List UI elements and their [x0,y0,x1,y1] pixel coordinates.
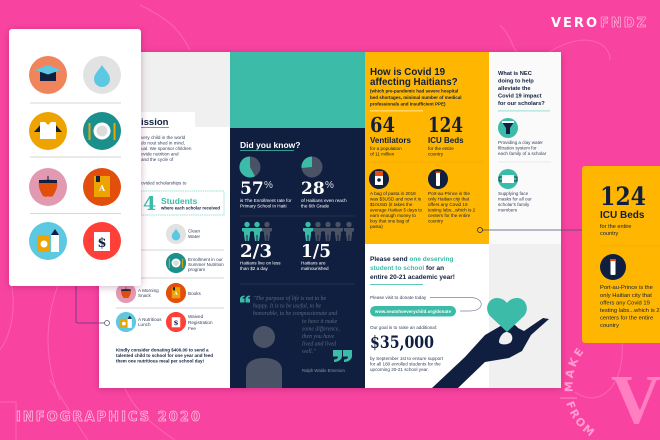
panel: donation [365,244,561,388]
benefit: clean water: Clean [188,228,200,234]
goal text: Our goal is to raise an additional: [370,325,437,330]
face mask text: scholar's family [498,202,530,207]
subheading: (which pre-pandemic had severe hospital [370,88,458,94]
benefit: summer nutrition: Enrollment in our [188,257,223,262]
stat icu beds: ICU Beds [428,136,464,145]
heading: one deserving [409,256,453,263]
stat 1 of 5 [301,241,331,271]
benefit: lunch: Lunch [138,322,151,327]
stat icu beds [428,113,464,156]
stat 2 of 3 [240,241,281,271]
face mask text: members [498,208,518,212]
donation link pill [370,306,456,316]
benefit: morning snack: Snack [138,293,151,298]
students box: 4 [143,193,156,215]
stat 57: % [264,180,273,191]
heading: doing to help [498,78,534,84]
icon: lunch [29,222,67,260]
panel: did you know [230,52,365,388]
callout: ICU beds: for the entire [600,224,631,230]
icon: plate [83,112,121,150]
pasta text: earn enough money to [370,213,416,218]
donate prompt: Please visit to donate today [370,295,427,300]
stat 57: is The Enrollment rate for [240,198,292,203]
water filter text: Providing a clay water [498,140,543,145]
quote author: Ralph Waldo Emerson [302,368,345,373]
footer title: INFOGRAPHICS 2020 [16,410,200,425]
pasta text: was $3USD and now it is [370,196,422,202]
benefit: lunch: A Nutritious [138,317,162,322]
students box: Students [161,196,198,206]
mission paragraph: ovide nutrition and [141,152,179,156]
mission paragraph: and the cycle of [141,157,174,162]
stat 2 of 3: than $2 a day [240,266,269,271]
panel: what is NEC doing [489,52,561,244]
stat ventilators: for a population [370,146,402,151]
goal details: by September 1st to ensure support [370,356,444,361]
stat 28: the 6th Grade [301,204,330,208]
testing text: Port-au-Prince is the [428,191,470,196]
callout: ICU beds: centers for the entire [600,316,653,322]
quote text: then you have [302,334,335,340]
heading: What is NEC [498,71,532,77]
stat 28 [301,179,347,208]
quote text: lived and lived [302,342,336,348]
brand logo: VERO [551,16,597,31]
benefit: lunch [116,312,162,332]
heading: Please send [370,256,409,263]
callout: ICU beds: 124 [600,182,646,211]
stat icu beds: country [428,152,444,156]
connector: card to lunch item [76,286,110,326]
brand logo: FNDZ [600,16,646,31]
icon: test tube [428,169,448,189]
students box: where each scholar received [160,206,220,210]
mission paragraph [141,135,192,186]
benefit: books [166,283,201,303]
mission paragraph: ual. We sponsor children [141,146,192,151]
stat 28: % [325,180,334,191]
quote text: some difference, [302,326,340,332]
benefit: summer nutrition: program [188,267,205,272]
pasta text: average Haitian 5 days to [370,208,423,212]
benefit: morning snack [116,283,159,303]
benefit: clean water [166,224,201,244]
stat ventilators: Ventilators [370,136,411,145]
water filter text: each family of a scholar [498,151,547,156]
stat 57: Primary School in Haiti [240,204,286,208]
icon: hand [432,318,549,388]
heading: affecting Haitians? [370,77,458,88]
testing text: centers for the entire [428,213,471,218]
heading: student to school [370,265,424,272]
connector: sheet to callout [478,228,582,232]
closing quote mark [333,350,352,362]
stat 1 of 5: 1/5 [301,241,331,262]
callout: ICU beds: testing labs...which is 2 [600,308,660,314]
icon: test tube large [600,254,626,280]
face mask text: masks for all our [498,196,532,202]
stat 57: 57 [240,179,264,199]
benefit: clean water: Water [188,234,201,239]
icon: uniform [29,112,67,150]
students box [141,191,224,215]
brand logo [551,16,646,31]
mission paragraph: very child in the world [141,135,186,140]
heading: for our scholars? [498,101,545,107]
quote text: to have it make [302,319,338,325]
benefit: registration fee: Fee [188,326,196,331]
benefit: registration fee [166,312,213,332]
callout: ICU beds: country [600,231,619,237]
callout: ICU beds: ICU Beds [600,210,645,221]
heading: for an [424,265,444,272]
heading: How is Covid 19 [370,67,446,78]
icon: water drop [83,56,121,94]
callout: ICU beds [582,166,660,343]
panel: icon card [9,29,141,286]
icon: book [83,168,121,206]
testing text: testing labs...which is 2 [428,208,476,212]
stat 28: of Haitians even reach [301,198,347,203]
goal details: for all 180 enrolled students for the [370,362,441,366]
icon: water filter [498,118,518,138]
icon: graduation cap [29,56,67,94]
stat ventilators: of 11 million [370,152,395,156]
goal amount: $35,000 [370,333,434,352]
stat 1 of 5: Haitians are [301,260,326,266]
heading: entire 20-21 academic year! [370,274,455,281]
people icons 2 of 3 [242,222,272,241]
circular lettering: from: FROM [566,401,594,436]
stat icu beds: for the entire [428,146,454,151]
person silhouette [246,326,282,388]
mission paragraph: do nout shed in mind, [141,140,185,146]
heading: Did you know? [240,140,300,150]
quote text: "The purpose of life is not to be [253,295,327,302]
stat 2 of 3: 2/3 [240,241,272,262]
opening quote mark [240,296,250,302]
donation appeal: them one nutritious meal per school day! [116,358,205,364]
icon: face mask [498,169,518,189]
stat 2 of 3: Haitians live on less [240,260,281,266]
subheading: bed shortages, minimal number of medical [370,95,462,100]
mission heading: ission [141,117,169,128]
donation link pill: www.neatshoeverychild.org/donate [374,309,452,314]
quote text: happy. It is to be useful, to be [253,302,322,310]
benefit: registration fee: Registration [188,320,213,325]
benefit: morning snack: A Morning [138,288,159,293]
arrow to link [430,298,481,311]
benefit: summer nutrition [166,253,224,273]
icon: pasta bag [369,169,389,189]
quote text: well." [302,349,316,355]
pasta text: pasta) [370,224,383,229]
pasta text: $10USD (it takes the [370,202,413,207]
benefit: summer nutrition: Summer Nutrition [188,262,224,267]
stat ventilators: 64 [370,113,395,137]
icon: heart [487,298,527,332]
callout: ICU beds: only Haitian city that [600,293,652,299]
stat icu beds: 124 [428,113,463,137]
callout: ICU beds: offers any Covid 19 [600,300,650,306]
testing text: offers any Covid 19 [428,202,468,207]
callout: ICU beds: Port-au-Prince is the [600,285,653,291]
pasta text: A bag of pasta in 2018 [370,191,416,196]
dividers [116,250,224,308]
pasta text: buy that one bag of [370,218,410,224]
stat 57 [240,179,292,208]
goal details: upcoming 20-21 school year. [370,367,429,372]
pie 28 percent [301,156,322,178]
circular lettering: make: MAKE [564,348,584,392]
icon: dollar [83,222,121,260]
stat 1 of 5: malnourished [301,266,329,271]
icon: apple [29,168,67,206]
stat ventilators [370,113,411,156]
heading: alleviate the [498,86,531,92]
heading: Covid 19 impact [498,94,542,100]
callout: ICU beds: country [600,323,619,329]
donation appeal: Kindly consider donating $400.00 to send a [116,348,209,352]
subheading: professionals and insufficient PPE) [370,102,446,106]
benefit: books: Books [188,291,201,296]
mission paragraph: ovided scholarships to [141,180,187,186]
people icons 1 of 5 [303,222,354,241]
testing text: only Haitian city that [428,196,470,202]
quote text: honorable, to be compassionate and [253,311,337,317]
donation appeal: talented child to school for one year and feed [116,353,213,358]
face mask text: Supplying face [498,191,529,196]
water filter text: filtration system for [498,146,537,150]
pie 57 percent [239,156,260,178]
panel: mission [99,52,230,364]
testing text: country [428,218,444,224]
stat 28: 28 [301,179,325,199]
document sheet [99,52,561,388]
panel: covid effects [365,52,489,244]
benefit: registration fee: Waived [188,314,204,319]
